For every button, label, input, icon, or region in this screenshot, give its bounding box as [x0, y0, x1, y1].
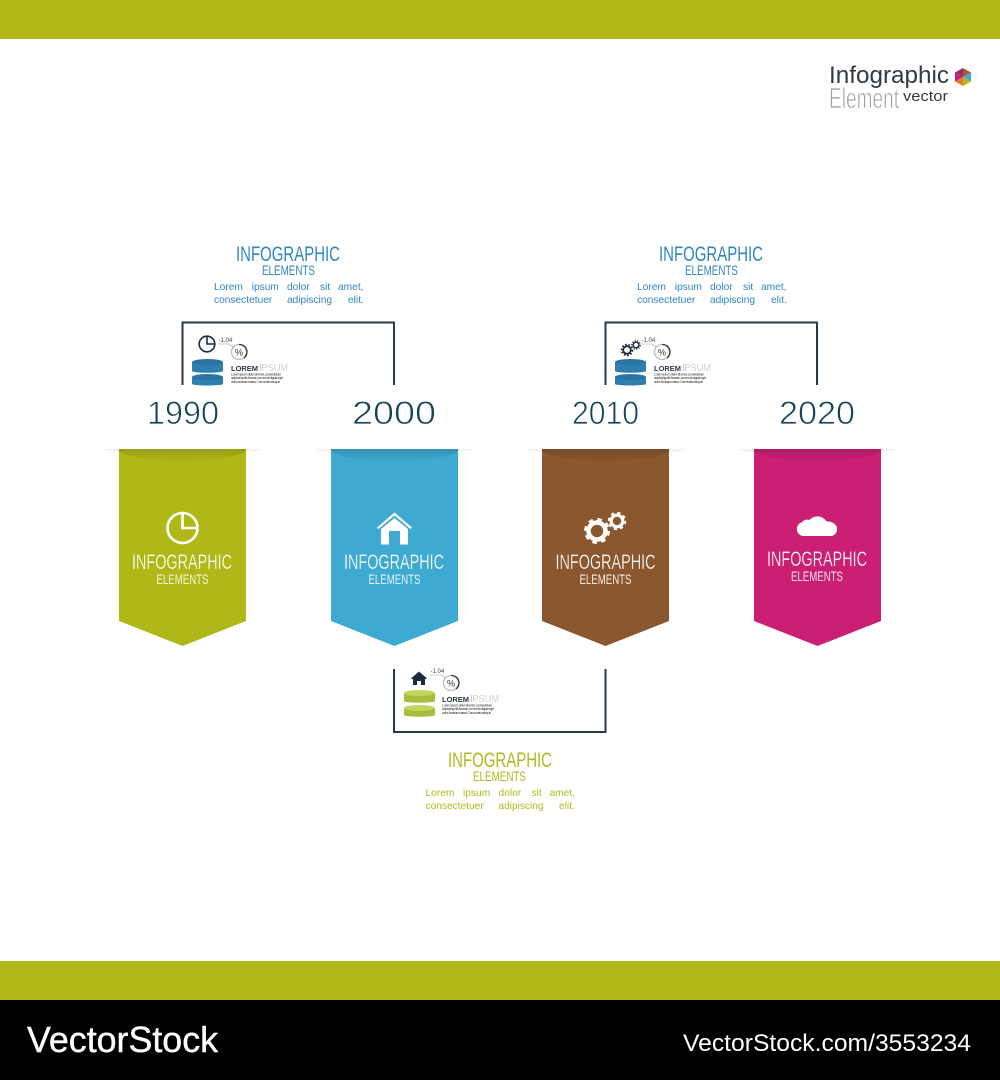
heading: top right	[637, 243, 787, 306]
heading: bottom centre: ipsum	[463, 788, 490, 799]
heading: top right: ipsum	[675, 282, 702, 293]
heading: bottom centre: adipiscing	[498, 801, 544, 812]
mini chart: 2010: Lorem ipsum dolor sit amet, consectetuer	[654, 372, 705, 376]
heading: bottom centre: INFOGRAPHIC	[448, 749, 552, 772]
heading: bottom centre: consectetuer	[426, 801, 484, 812]
mini chart: 2000: -1.04	[430, 669, 445, 675]
bottom green bar	[0, 961, 1000, 1000]
heading: bottom centre: Lorem	[426, 788, 454, 799]
icon: cloud	[797, 516, 837, 536]
heading: top right: sit	[743, 282, 753, 293]
bracket: 2010 to 2020	[606, 322, 817, 385]
mini chart: 1990: dolor. Aenean massa. Cum sociis natoque	[231, 380, 280, 384]
mini chart: 2010: %	[658, 348, 666, 358]
banner: 2000: INFOGRAPHIC	[344, 551, 444, 574]
icon: house	[412, 672, 426, 685]
logo: Infographic Element vector: Infographic	[829, 62, 949, 89]
heading: bottom centre: amet,	[550, 788, 575, 799]
logo: Infographic Element vector: Element	[829, 83, 899, 115]
icon: coloured hexagon	[955, 68, 971, 86]
banner: 2010: INFOGRAPHIC	[556, 551, 656, 574]
mini chart: 1990	[192, 336, 288, 386]
heading: top left: Lorem	[214, 282, 243, 293]
heading: top left: dolor	[287, 282, 310, 293]
year: 2000: 2000	[352, 395, 436, 431]
footer	[0, 1000, 1000, 1080]
banner: 1990	[103, 437, 262, 646]
heading: top right: Lorem	[637, 282, 666, 293]
heading: top right: elit.	[771, 295, 787, 306]
heading: bottom centre: ELEMENTS	[473, 768, 526, 784]
heading: top left: adipiscing	[287, 295, 332, 306]
heading: top left: ELEMENTS	[262, 262, 315, 278]
mini chart: 1990: -1.04	[218, 338, 233, 344]
heading: top left: amet,	[338, 282, 363, 293]
heading: top right: dolor	[710, 282, 733, 293]
heading: top right: ELEMENTS	[685, 262, 738, 278]
year: 2010: 2010	[572, 395, 639, 431]
icon: pie	[199, 336, 215, 352]
mini chart: 2000: Lorem ipsum dolor sit amet, consectetuer	[442, 704, 493, 708]
heading: top left: INFOGRAPHIC	[236, 243, 340, 266]
icon: gears	[586, 513, 625, 542]
banner: 2020	[738, 437, 897, 646]
logo: Infographic Element vector: vector	[903, 88, 948, 105]
heading: bottom centre: dolor	[498, 788, 522, 799]
mini chart: 1990: IPSUM	[259, 363, 288, 374]
banner: 1990: INFOGRAPHIC	[132, 551, 232, 574]
heading: bottom centre	[426, 749, 575, 812]
bracket: 1990 to 2000	[182, 322, 394, 385]
mini chart: 2010: -1.04	[642, 338, 656, 344]
icon: house	[377, 512, 412, 544]
heading: top left: ipsum	[252, 282, 279, 293]
logo: Infographic Element vector	[829, 62, 971, 115]
footer: VectorStock	[27, 1019, 219, 1060]
banner: 2020: INFOGRAPHIC	[767, 548, 867, 571]
mini chart: 2000: IPSUM	[470, 694, 499, 705]
mini chart: 2000: adipiscing elit. Aenean commodo ligula eget	[442, 707, 494, 711]
banner: 2000	[315, 437, 474, 646]
mini chart: 2000: %	[447, 678, 455, 688]
bracket: 2000 to 2010	[394, 669, 606, 732]
year: 2020: 2020	[779, 395, 855, 431]
icon: gears	[622, 341, 640, 356]
banner: 2010	[526, 437, 685, 646]
top green bar	[0, 0, 1000, 39]
heading: top left: consectetuer	[214, 295, 273, 306]
mini chart: 1990: Lorem ipsum dolor sit amet, consectetuer	[231, 372, 282, 376]
heading: top right: amet,	[761, 282, 786, 293]
mini chart: 1990: %	[235, 348, 243, 358]
mini chart: 2000: dolor. Aenean massa. Cum sociis natoque	[442, 711, 491, 715]
heading: bottom centre: elit.	[559, 801, 575, 812]
banner: 2020: ELEMENTS	[791, 569, 843, 584]
year: 1990: 1990	[147, 395, 219, 431]
icon: pie	[168, 513, 198, 543]
heading: top left: elit.	[348, 295, 364, 306]
heading: top right: adipiscing	[710, 295, 755, 306]
banner: 2000: ELEMENTS	[368, 572, 420, 587]
banner: 2010: ELEMENTS	[580, 572, 632, 587]
mini chart: 2000: LOREM	[442, 695, 469, 704]
banner: 1990: ELEMENTS	[156, 572, 208, 587]
mini chart: 2010	[615, 338, 711, 386]
mini chart: 2010: dolor. Aenean massa. Cum sociis natoque	[654, 380, 703, 384]
footer: VectorStock.com/3553234	[683, 1030, 971, 1057]
heading: top right: INFOGRAPHIC	[659, 243, 763, 266]
mini chart: 2000	[404, 669, 499, 717]
mini chart: 2010: LOREM	[654, 364, 681, 373]
mini chart: 2010: IPSUM	[682, 363, 711, 374]
mini chart: 2010: adipiscing elit. Aenean commodo ligula eget	[654, 376, 706, 380]
mini chart: 1990: adipiscing elit. Aenean commodo ligula eget	[231, 376, 283, 380]
heading: top left	[214, 243, 364, 306]
heading: top left: sit	[320, 282, 330, 293]
heading: top right: consectetuer	[637, 295, 696, 306]
mini chart: 1990: LOREM	[231, 364, 258, 373]
heading: bottom centre: sit	[532, 788, 542, 799]
